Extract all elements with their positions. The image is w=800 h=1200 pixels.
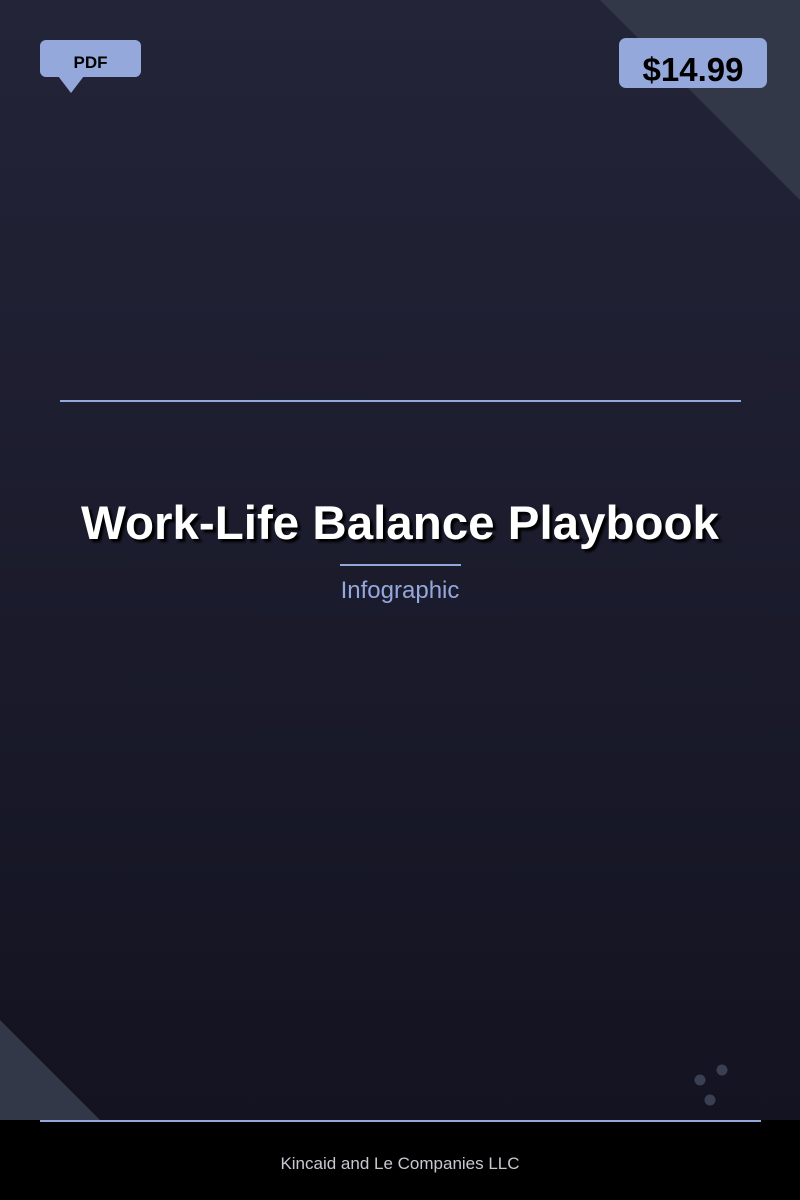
subtitle underline (340, 564, 461, 566)
badge: PDF (40, 40, 141, 93)
footer text: Kincaid and Le Companies LLC (280, 1154, 520, 1173)
price tag (619, 38, 767, 88)
price tag: $14.99 (643, 51, 743, 88)
title: Work-Life Balance Playbook (81, 497, 719, 550)
subtitle: Infographic (341, 577, 459, 604)
footer (0, 1120, 800, 1200)
badge: PDF: PDF (74, 53, 108, 72)
decorative dots (694, 1064, 728, 1106)
top divider (60, 400, 741, 402)
